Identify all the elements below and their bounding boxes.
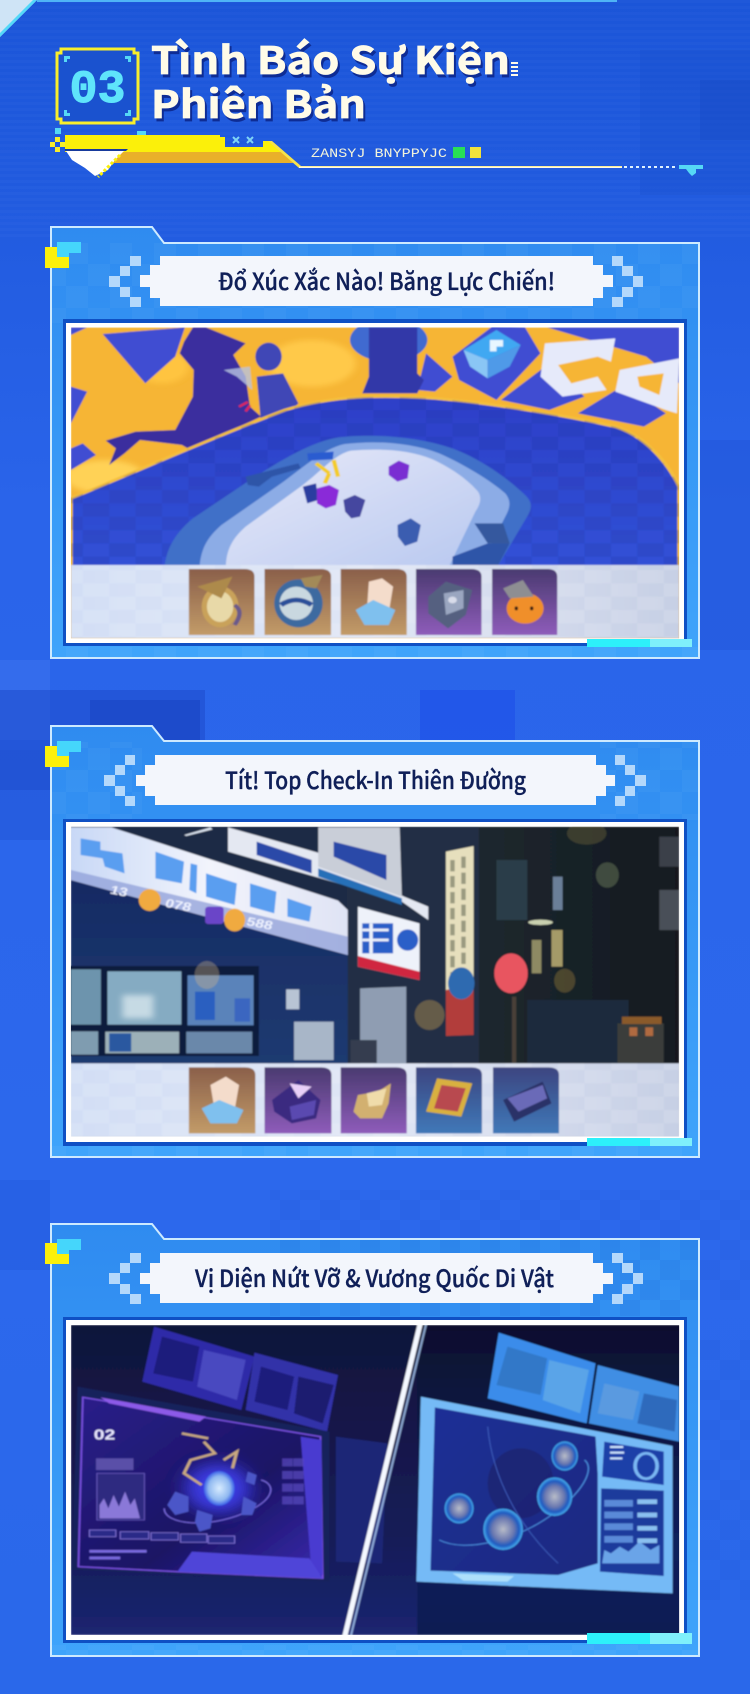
scene: city street: 588 [245, 914, 275, 932]
corner bar [587, 1633, 692, 1644]
big sign [71, 827, 348, 955]
corner bar [587, 1138, 692, 1146]
white letters [541, 338, 615, 397]
tower sign [446, 846, 474, 992]
corner accent [0, 0, 617, 37]
tile wall [360, 987, 406, 1063]
scene: city street: 13 [108, 883, 130, 899]
heading bar [109, 1253, 643, 1304]
bokeh [195, 822, 619, 1030]
kiosk [618, 1023, 664, 1063]
reward icons row [189, 1067, 559, 1133]
right screens [416, 1333, 679, 1593]
reward strip [71, 1063, 679, 1137]
icon: comic book [416, 1067, 482, 1133]
number badge [57, 49, 138, 123]
icon: armor cube [416, 569, 482, 635]
icon: crystal [189, 1067, 255, 1133]
number 03: 03 [70, 64, 126, 116]
corner accent [45, 242, 81, 268]
left screens [72, 1327, 387, 1582]
icon: crystal [341, 569, 407, 635]
reward icons row [189, 569, 557, 635]
upper signs [228, 827, 428, 920]
floor [71, 397, 679, 638]
title: Phiên Bản [151, 74, 366, 129]
scene: split screens [71, 1325, 681, 1635]
scene: dice table [65, 318, 679, 638]
image frame [63, 1317, 687, 1643]
right building [496, 837, 679, 1063]
marker [307, 452, 334, 461]
panel: check-in event [45, 726, 699, 1157]
heading bar [109, 256, 643, 307]
panel frame [51, 227, 699, 658]
title [151, 30, 518, 129]
scene: city street: 078 [163, 896, 194, 914]
image frame [63, 819, 687, 1146]
divider [342, 1325, 423, 1635]
heading bar [104, 755, 646, 806]
cube [463, 330, 521, 360]
dice [389, 461, 409, 482]
left screens: 02 [94, 1426, 115, 1443]
code label [311, 146, 481, 161]
balloons [494, 953, 528, 993]
corner accent [45, 741, 81, 767]
panel frame [51, 726, 699, 1157]
reward strip [71, 565, 679, 638]
title: Tình Báo Sự Kiện [151, 30, 510, 85]
circle behind column [348, 327, 428, 360]
icon: ticket cards [493, 1067, 559, 1133]
panel: dice event [45, 227, 699, 658]
corner accent [45, 1239, 81, 1264]
heading bar: Vị Diện Nứt Vỡ & Vương Quốc Di Vật [194, 1259, 554, 1294]
heading bar: Tít! Top Check-In Thiên Đường [225, 761, 526, 796]
panel: relic event [45, 1224, 699, 1656]
table [164, 436, 531, 568]
code label: ZANSYJ BNYPPYJC [311, 146, 447, 161]
icon: gold ore [341, 1067, 407, 1133]
windows [67, 966, 334, 1060]
panel frame [51, 1224, 699, 1656]
image frame [63, 319, 687, 646]
icon: potion orb [265, 569, 331, 635]
heading bar: Đổ Xúc Xắc Nào! Băng Lực Chiến! [218, 262, 555, 297]
corner bar [587, 639, 692, 647]
icon: orange blob [492, 569, 557, 635]
decorative rule [50, 128, 703, 177]
icon: star book [265, 1067, 331, 1133]
scene: city street [67, 822, 679, 1137]
icon: gold pocket watch [189, 569, 254, 635]
red white sign [358, 907, 419, 980]
section heading [50, 30, 703, 177]
